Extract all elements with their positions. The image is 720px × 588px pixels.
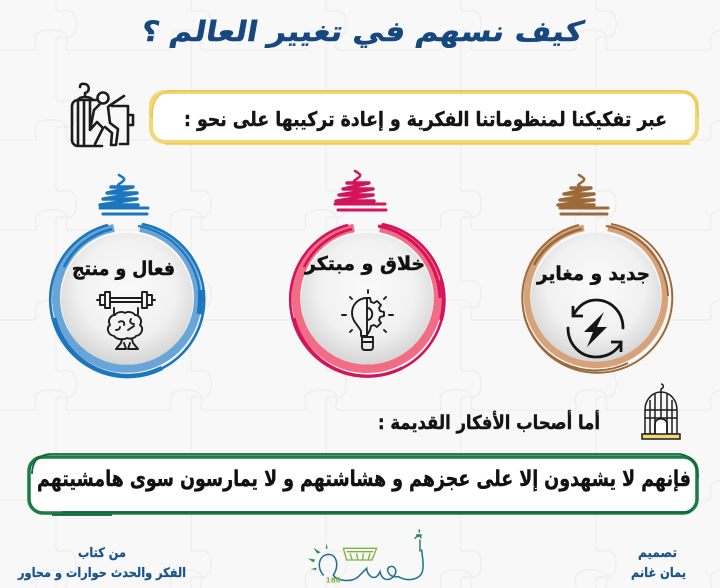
icon: person breaking out of cage bbox=[72, 84, 133, 146]
title: كيف نسهم في تغيير العالم ؟ bbox=[139, 15, 587, 48]
credit: designer: تصميم bbox=[638, 546, 677, 561]
label: جديد و مغاير bbox=[536, 263, 650, 285]
spiral: brown bbox=[558, 175, 608, 214]
logo: 180 bbox=[326, 575, 341, 584]
spiral: blue bbox=[100, 175, 148, 214]
panel: new and different bbox=[522, 224, 672, 373]
icon: brain lifting a barbell bbox=[97, 292, 155, 349]
credit: book source: من كتاب bbox=[78, 546, 126, 561]
spiral: pink bbox=[335, 171, 386, 210]
icon: birdcage bbox=[642, 384, 680, 439]
panel: intro statement bbox=[151, 91, 698, 144]
label: خلاق و مبتكر bbox=[304, 253, 425, 275]
credit: book source bbox=[17, 546, 186, 581]
credit: designer bbox=[631, 546, 686, 581]
panel: effective and productive bbox=[50, 224, 204, 377]
heading: holders of old ideas: أما أصحاب الأفكار القديمة : bbox=[378, 410, 600, 434]
credit: designer: يمان غانم bbox=[631, 566, 686, 581]
panel: closing statement bbox=[29, 454, 698, 515]
icon: energy refresh bbox=[568, 300, 623, 357]
credit: book source: الفكر والحدث حوارات و محاور bbox=[17, 566, 186, 581]
icon: lightbulb with gear bbox=[342, 290, 393, 350]
panel: creative and innovative bbox=[290, 224, 444, 377]
label: فعال و منتج bbox=[72, 258, 175, 280]
logo bbox=[308, 530, 423, 584]
